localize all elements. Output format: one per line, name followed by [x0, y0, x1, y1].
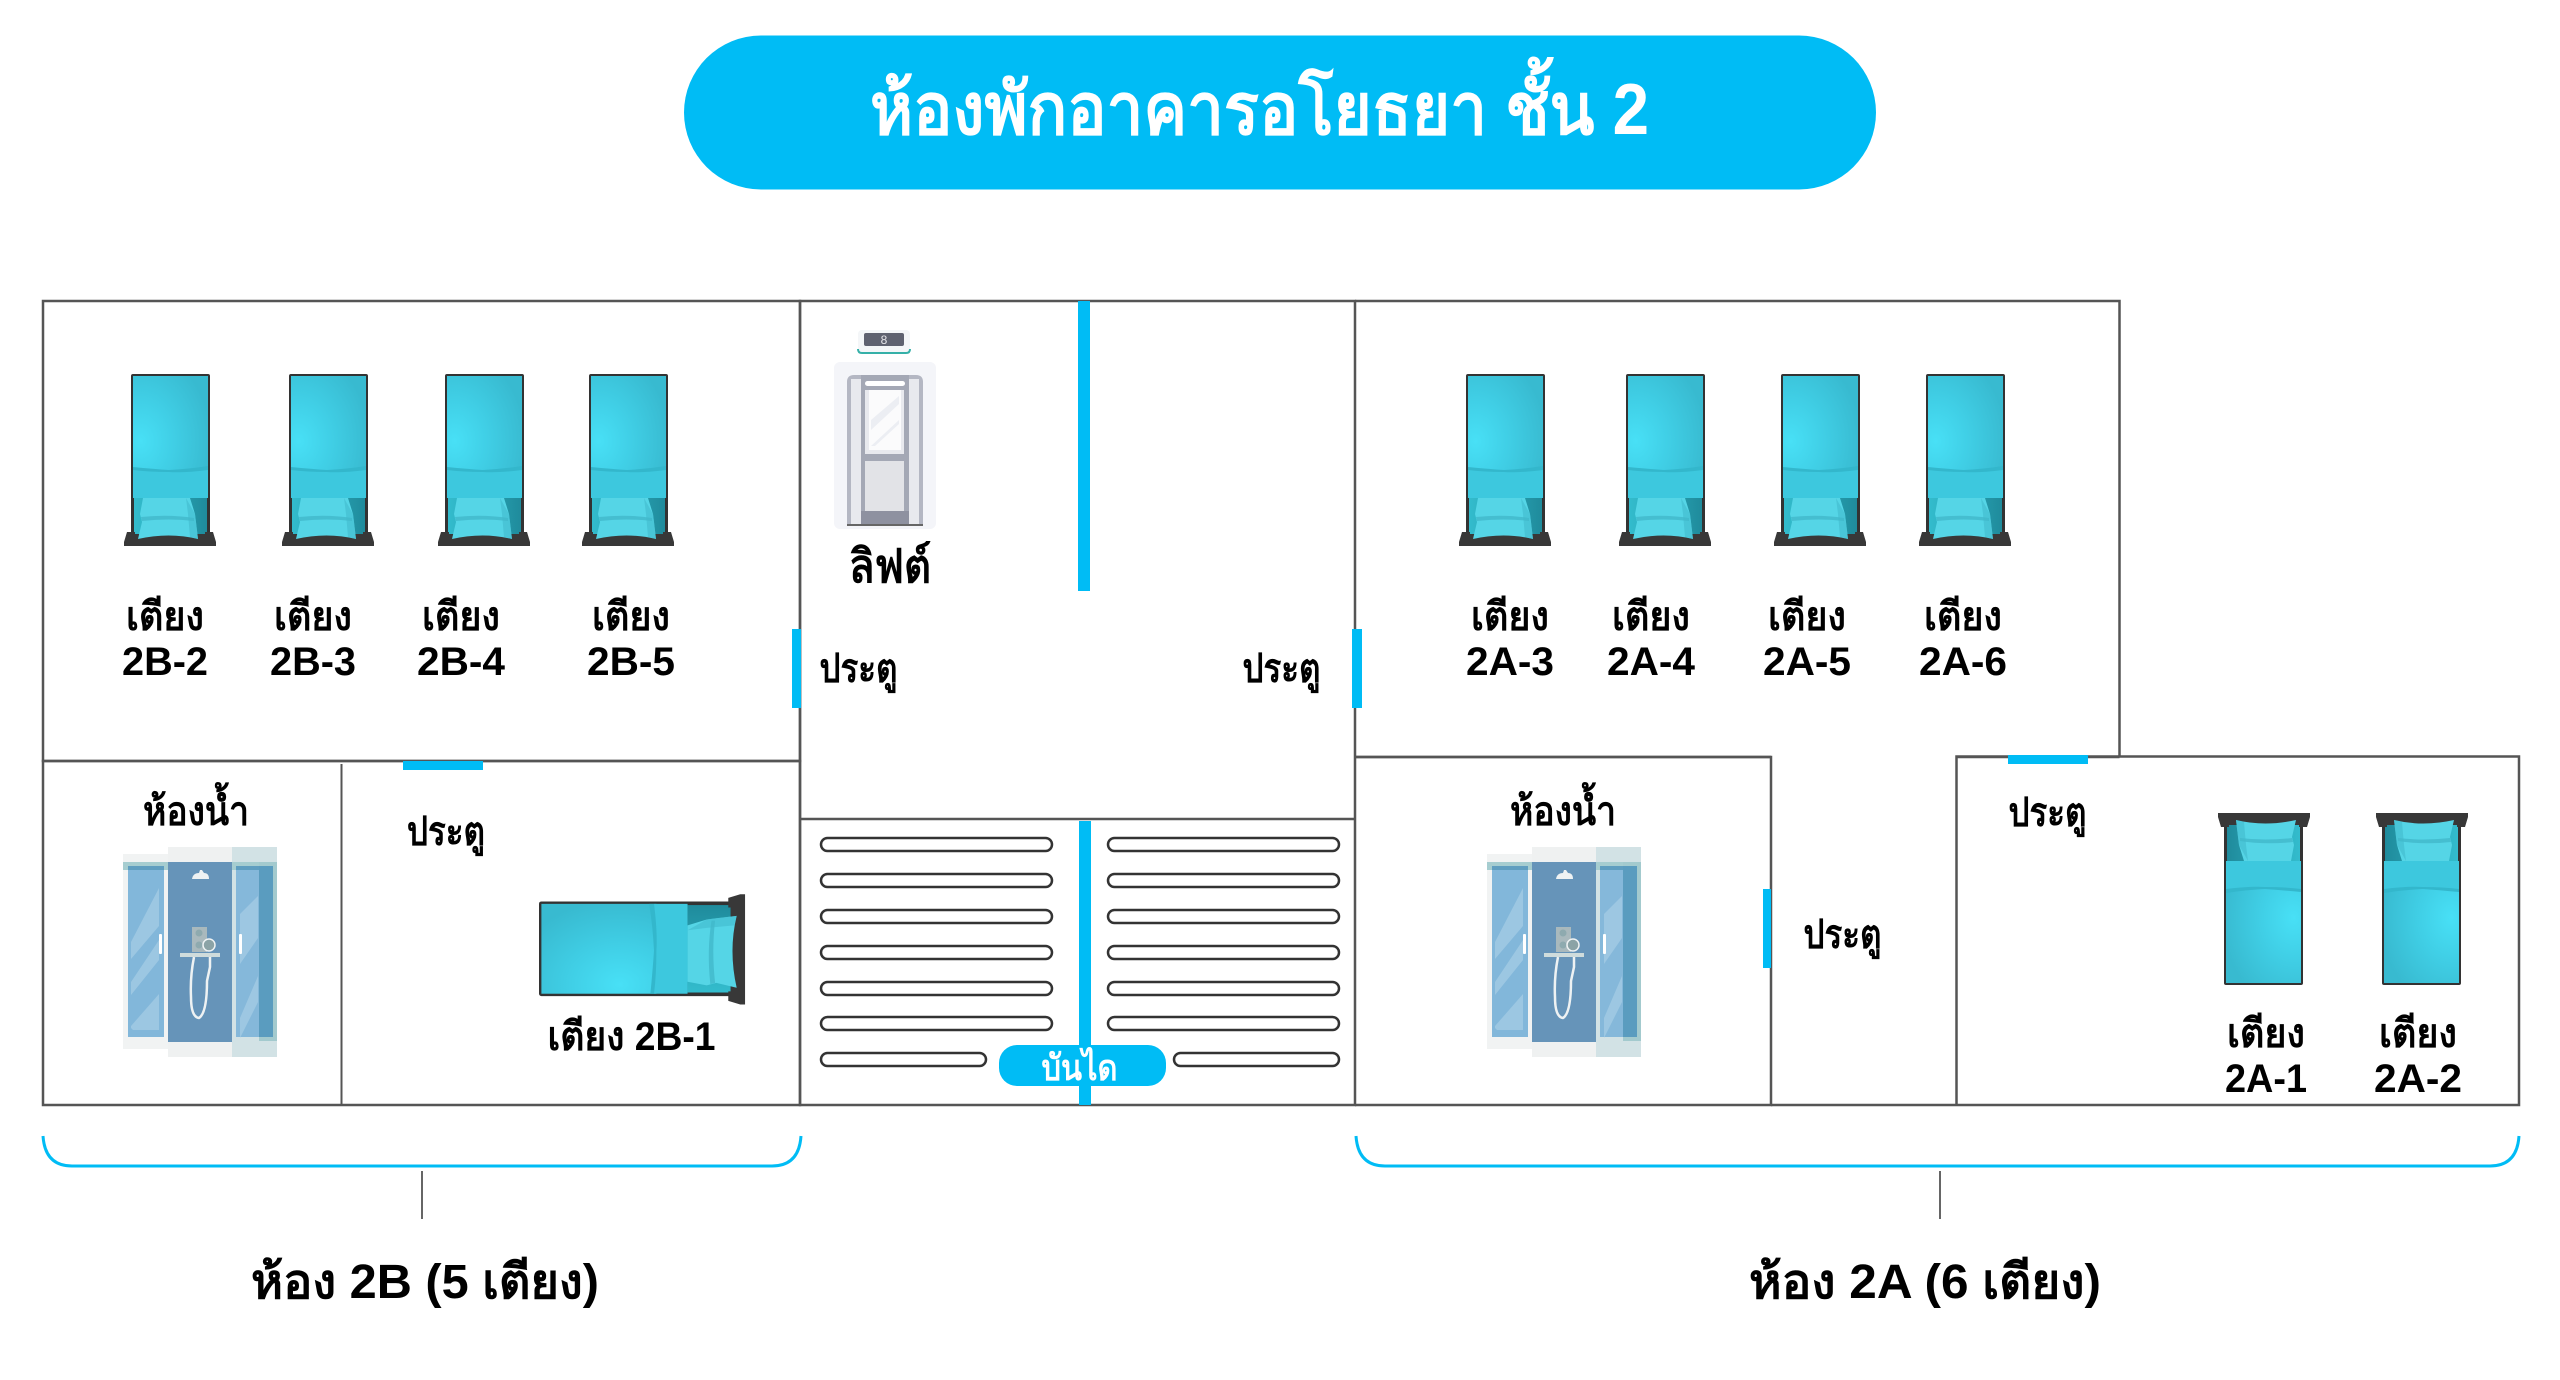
bed 2B-4 — [438, 374, 530, 546]
panel: central corridor — [792, 301, 1362, 1105]
label 2B-5: เตียง — [592, 595, 670, 639]
label 2B-2 — [122, 595, 208, 684]
door marker 2B lower — [403, 761, 483, 770]
label 2A-2: เตียง — [2379, 1012, 2457, 1056]
label 2B-2: 2B-2 — [122, 640, 208, 684]
label: stairs: บันได — [1042, 1046, 1118, 1088]
icon: shower 2A — [1487, 847, 1641, 1057]
label: right door: ประตู — [1242, 647, 1320, 693]
label: door: ประตู — [407, 810, 485, 856]
bed 2B-5 — [582, 374, 674, 546]
label 2B-5 — [587, 595, 675, 684]
label 2A-3: เตียง — [1471, 595, 1549, 639]
label 2A-1 — [2225, 1012, 2307, 1101]
label 2A-2: 2A-2 — [2374, 1057, 2462, 1101]
bracket: room 2A — [1356, 1136, 2519, 1309]
bracket: room 2B — [43, 1136, 801, 1309]
label: elevator: ลิฟต์ — [849, 540, 931, 592]
label 2A-4: 2A-4 — [1607, 640, 1696, 684]
title: ห้องพักอาคารอโยธยา ชั้น 2 — [870, 56, 1649, 150]
summary label 2A: ห้อง 2A (6 เตียง) — [1749, 1256, 2101, 1309]
bed 2A-2 — [2376, 813, 2468, 985]
label: door: ประตู — [2008, 791, 2086, 837]
label 2B-4: 2B-4 — [417, 640, 506, 684]
label 2A-5: เตียง — [1768, 595, 1846, 639]
panel: room 2B upper (beds 2B-2 to 2B-5) — [43, 301, 800, 761]
bed 2A-4 — [1619, 374, 1711, 546]
label 2A-3: 2A-3 — [1466, 640, 1554, 684]
label 2B-3: เตียง — [274, 595, 352, 639]
label 2B-2: เตียง — [126, 595, 204, 639]
bed 2B-2 — [124, 374, 216, 546]
bed 2A-5 — [1774, 374, 1866, 546]
bed 2A-6 — [1919, 374, 2011, 546]
door marker left — [792, 629, 801, 708]
label 2A-1: 2A-1 — [2225, 1057, 2307, 1101]
panel: room 2A upper (beds 2A-3 to 2A-6) — [1355, 301, 2120, 757]
stairs pill — [999, 1045, 1166, 1086]
label 2B-4 — [417, 595, 506, 684]
panel: room 2A bathroom — [1355, 757, 1882, 1105]
label 2B-3: 2B-3 — [270, 640, 356, 684]
label 2A-5 — [1763, 595, 1851, 684]
label 2A-4: เตียง — [1612, 595, 1690, 639]
title banner — [684, 36, 1876, 190]
stairs — [821, 821, 1339, 1105]
label 2B-5: 2B-5 — [587, 640, 675, 684]
door marker bathroom 2A — [1763, 889, 1771, 968]
bed 2B-3 — [282, 374, 374, 546]
label 2B-4: เตียง — [422, 595, 500, 639]
icon: elevator: 8 — [881, 333, 888, 347]
label 2A-1: เตียง — [2227, 1012, 2305, 1056]
label 2A-2 — [2374, 1012, 2462, 1101]
label: door: ประตู — [1804, 913, 1882, 959]
label: left door: ประตู — [820, 647, 898, 693]
label 2B-1: เตียง 2B-1 — [548, 1015, 716, 1059]
heading: bathroom 2A: ห้องน้ำ — [1510, 782, 1616, 834]
bed 2A-3 — [1459, 374, 1551, 546]
label 2A-6: เตียง — [1924, 595, 2002, 639]
summary label 2B: ห้อง 2B (5 เตียง) — [251, 1256, 599, 1309]
icon: shower 2B — [123, 847, 277, 1057]
label 2A-6: 2A-6 — [1919, 640, 2007, 684]
label 2A-6 — [1919, 595, 2007, 684]
icon: elevator — [834, 330, 936, 529]
label 2A-4 — [1607, 595, 1696, 684]
label 2B-3 — [270, 595, 356, 684]
panel: room 2B lower (bathroom and bed 2B-1) — [43, 761, 800, 1105]
bed 2A-1 — [2218, 813, 2310, 985]
door marker right — [1352, 629, 1362, 708]
door marker 2A — [2008, 755, 2088, 764]
label 2A-5: 2A-5 — [1763, 640, 1851, 684]
heading: bathroom 2B: ห้องน้ำ — [143, 782, 249, 834]
corridor divider — [1078, 301, 1090, 591]
label 2A-3 — [1466, 595, 1554, 684]
bed 2B-1 — [539, 894, 745, 1004]
panel: room 2A lower (beds 2A-1, 2A-2) — [1771, 755, 2519, 1105]
